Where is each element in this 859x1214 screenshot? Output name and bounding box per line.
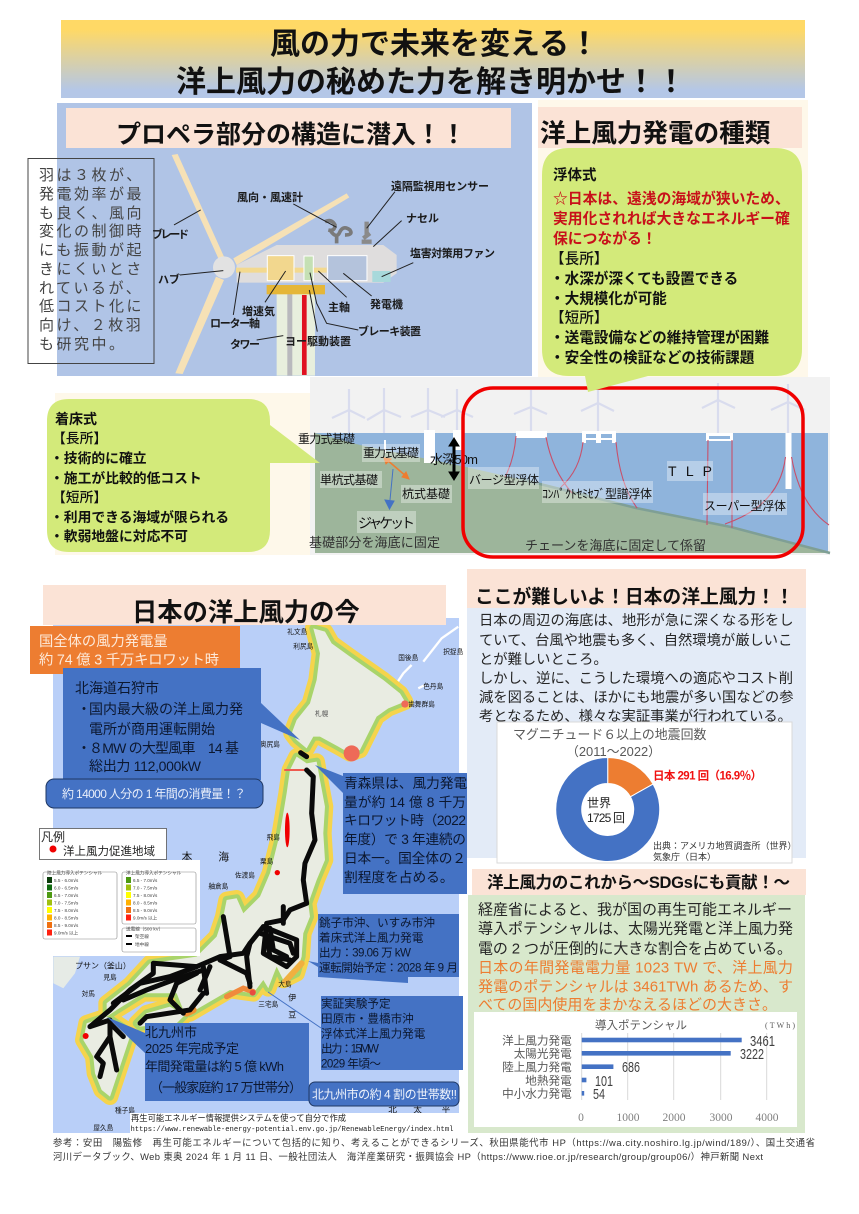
chart: introduction potential bars (474, 1012, 797, 1127)
callout: Choshi and Isumi: 出力：39.06 万 kW (319, 946, 411, 960)
callout: Tahara and Toyohashi: 浮体式洋上風力発電 (321, 1026, 426, 1040)
map place names: 屋久島 (93, 1123, 114, 1132)
turbine part labels: ブレード (152, 227, 189, 241)
turbine part labels: 主軸 (328, 300, 350, 314)
text block: future: 経産省によると、我が国の再生可能エネルギー (478, 902, 792, 918)
text block: future: べての国内使用をまかなえるほどの大きさ。 (478, 996, 777, 1014)
references: 河川データブック、Web 東奥 2024 年 1 月 11 日、一般社団法人 海洋産業研究・振興協会 HP（https://www.rioe.or.jp/research/group/group06/）神戸新聞 Next (53, 1151, 763, 1162)
callout: Ishikari Hokkaido (63, 668, 300, 780)
white legend panel: 6.0 - 6.5m/s (54, 886, 79, 890)
diagram labels: 水深50m (430, 452, 478, 467)
text block: future: 発電のポテンシャルは 3461TWh あるため、す (478, 978, 793, 996)
callout: Aomori: 青森県は、風力発電 (344, 776, 468, 791)
references: 参考：安田 陽監修 再生可能エネルギーについて包括的に知り、考えることができるシリーズ、秋田県能代市 HP（https://wa.city.noshiro.lg.jp/wind/189/）、国土交通省 (53, 1137, 815, 1148)
white legend panel: 5.5 - 6.0m/s (54, 878, 79, 883)
white legend panel: 洋上風力導入ポテンシャル (126, 870, 182, 876)
callout: Kitakyushu (107, 1017, 309, 1101)
turbine part labels: ナセル (406, 212, 439, 225)
white legend panel: 9.0m/s 以上 (133, 914, 158, 920)
heading: types of offshore wind: 洋上風力発電の種類 (540, 119, 771, 148)
diagram labels: チェーンを海底に固定して係留 (525, 538, 706, 553)
turbine part labels: タワー (230, 338, 260, 351)
callout: Ishikari Hokkaido: 総出力 112,000kW (89, 758, 202, 774)
callout: Kitakyushu: 2025 年完成予定 (145, 1041, 239, 1056)
diagram labels: 重力式基礎 (363, 446, 419, 460)
callout: Ishikari Hokkaido: ・ (77, 701, 91, 717)
map place names: 伊 (288, 993, 296, 1003)
callout: Tahara and Toyohashi: 出力：15MW (321, 1042, 379, 1056)
panel: propeller structure (28, 103, 532, 376)
coast band outer (83, 628, 405, 1097)
chart: introduction potential bars: 686 (622, 1059, 640, 1076)
white legend panel: 8.5 - 9.0m/s (133, 908, 158, 913)
panel: why it is difficult (467, 569, 806, 863)
chart: earthquakes donut: 1725 回 (587, 811, 625, 825)
map source: 再生可能エネルギー情報提供システムを使って自分で作成 (131, 1113, 346, 1123)
callout: Tahara and Toyohashi: 実証実験予定 (321, 996, 391, 1010)
heading: future (472, 869, 806, 895)
turbine part labels: 塩害対策用ファン (410, 246, 495, 260)
callout: Aomori: 量が約 14 億 8 千万 (344, 795, 466, 810)
map place names: 大島 (278, 980, 292, 989)
callout: Ishikari Hokkaido: 電所が商用運転開始 (89, 721, 215, 737)
map place names: 択捉島 (443, 647, 464, 656)
turbine part labels: ヨー駆動装置 (285, 334, 351, 348)
callout: share of households (297, 1082, 459, 1106)
map source (130, 1113, 459, 1134)
text block: difficulties: ていて、台風や地震も多く、自然環境が厳しいこ (479, 632, 792, 649)
white legend panel (43, 860, 200, 956)
references (53, 1137, 815, 1162)
text block: blade explanation: 低コスト化に (39, 298, 144, 315)
callout: fixed-bottom type: ・利用できる海域が限られる (50, 509, 229, 525)
text block: blade explanation: れているが、 (39, 280, 143, 297)
chart: introduction potential bars: 101 (595, 1073, 613, 1090)
callout: Choshi and Isumi: 着床式洋上風力発電 (319, 930, 424, 944)
Korea (53, 957, 80, 988)
map source: https://www.renewable-energy-potential.env.go.jp/RenewableEnergy/index.html (130, 1126, 454, 1134)
water depth arrow (449, 438, 459, 480)
callout: fixed-bottom type: ・技術的に確立 (50, 450, 147, 466)
text block: blade explanation: も研究中。 (39, 336, 127, 353)
map background (53, 618, 459, 1133)
callout: floating type: ・大規模化が可能 (550, 290, 667, 308)
chart: introduction potential bars: 54 (593, 1086, 605, 1103)
heading: types of offshore wind (538, 107, 802, 148)
text block: difficulties: しかし、逆に、こうした環境への適応やコスト削 (479, 670, 793, 687)
title banner: 洋上風力の秘めた力を解き明かせ！！ (176, 66, 686, 99)
chart: introduction potential bars: 太陽光発電 (514, 1047, 572, 1061)
map: Japan with wind potential (53, 627, 464, 1132)
map place names: 種子島 (115, 1105, 135, 1114)
white legend panel: 6.5 - 7.0m/s (54, 893, 79, 898)
map place names: プサン（釜山） (75, 960, 131, 970)
callout: Aomori: 割程度を占める。 (344, 870, 454, 885)
callout: Ishikari Hokkaido: 国内最大級の洋上風力発 (89, 701, 243, 717)
high wind zones (187, 770, 305, 1013)
chart: earthquakes donut: 日本 291 回（16.9％） (653, 768, 762, 782)
diagram: wind turbine cross-section (172, 154, 413, 376)
callout: fixed-bottom type: 【長所】 (52, 431, 107, 446)
callout: Tahara and Toyohashi: 2029 年頃～ (321, 1056, 381, 1070)
chart: introduction potential bars: 3000 (710, 1112, 733, 1124)
callout: national total: 約 74 億 3 千万キロワット時 (39, 652, 219, 668)
map place names: 札幌 (315, 709, 329, 718)
diagram labels: バージ型浮体 (469, 473, 539, 487)
callout: fixed-bottom type: 【短所】 (52, 490, 107, 505)
white legend panel: 7.5 - 8.0m/s (133, 893, 158, 898)
map place names: 対馬 (82, 989, 95, 998)
red highlight frame (463, 388, 803, 557)
power grid (90, 753, 315, 1077)
chart: earthquakes donut: マグニチュード６以上の地震回数 (513, 727, 706, 742)
white legend panel: 7.0 - 7.5m/s (54, 900, 79, 906)
chart: introduction potential bars: 2000 (662, 1112, 686, 1124)
map place names (75, 627, 464, 1132)
chart: introduction potential bars: 3461 (750, 1033, 775, 1050)
title banner: 風の力で未来を変える！ (270, 28, 599, 61)
diagram: foundations and floating types (298, 377, 830, 557)
callout: Ishikari Hokkaido: ８MW の大型風車 14 基 (89, 740, 239, 756)
white legend panel: 8.0 - 8.5m/s (54, 916, 79, 920)
callout: Aomori: 年度）で 3 年連続の (344, 831, 466, 847)
callout: Choshi and Isumi: 銚子市沖、いすみ市沖 (319, 916, 435, 930)
legend: promotion area: 洋上風力促進地域 (63, 844, 155, 858)
callout: floating type: ☆日本は、遠浅の海域が狭いため、 (553, 190, 790, 208)
map place names: 平 (442, 1104, 451, 1114)
callout: national total: 国全体の風力発電量 (39, 633, 168, 650)
chart: introduction potential bars: 0 (578, 1112, 584, 1124)
white legend panel: 送電線（500 kV） (126, 926, 163, 932)
diagram labels: ｺﾝﾊﾟｸﾄｾﾐｾﾌﾞ型譜浮体 (542, 486, 652, 501)
diagram labels: 重力式基礎 (298, 432, 355, 446)
map place names: 利尻島 (293, 641, 314, 650)
white legend panel: 地中線 (135, 941, 149, 948)
map place names: 本 (182, 851, 193, 864)
chart: introduction potential bars: 陸上風力発電 (502, 1060, 572, 1074)
callout: Aomori (315, 765, 468, 894)
fixed foundations (384, 430, 463, 463)
callout: national total (30, 626, 240, 674)
text block: blade explanation: 変化の制御時 (39, 223, 144, 240)
turbine part labels: ブレーキ装置 (358, 324, 421, 338)
text block: future (478, 902, 793, 1014)
label boxes (320, 444, 787, 533)
heading: difficulties: ここが難しいよ！日本の洋上風力！！ (475, 585, 794, 607)
text block: blade explanation: 発電効率が最 (39, 186, 144, 203)
chart: earthquakes donut: （2011～2022） (566, 744, 661, 759)
legend: promotion area: 凡例 (41, 830, 65, 844)
chart: introduction potential bars: 4000 (756, 1112, 779, 1124)
chart: earthquakes donut: 出典：アメリカ地質調査所（世界） (653, 840, 797, 851)
white legend panel: 6.5 - 7.0m/s (133, 878, 158, 883)
text block: blade explanation (28, 158, 154, 364)
callout: floating type: 保につながる！ (553, 230, 657, 248)
map place names: 歯舞群島 (408, 700, 435, 709)
text block: difficulties: 減を図ることは、ほかにも地震が多い国などの参 (479, 689, 794, 706)
callout: household consumption (46, 779, 263, 808)
map place names: 太 (413, 1103, 422, 1114)
chart: introduction potential bars: 地熱発電 (525, 1073, 572, 1087)
diagram labels: スーパー型浮体 (704, 499, 786, 513)
text block: future: 日本の年間発電電力量 1023 TW で、洋上風力 (478, 960, 793, 976)
chart: earthquakes donut: 気象庁（日本） (653, 851, 716, 862)
land (83, 628, 405, 1097)
text block: difficulties: とが難しいところ。 (479, 651, 608, 668)
heading: propeller structure: プロペラ部分の構造に潜入！！ (116, 121, 466, 149)
turbines (332, 383, 805, 434)
callout: fixed-bottom type: ・軟弱地盤に対応不可 (50, 528, 188, 544)
turbine part labels: 風向・風速計 (237, 190, 303, 204)
white legend panel: 7.0 - 7.5m/s (133, 886, 158, 890)
turbine part labels: 発電機 (370, 297, 403, 311)
turbine part labels (152, 179, 495, 351)
callout: Ishikari Hokkaido: ・ (77, 740, 91, 756)
turbine part labels: ハブ (158, 272, 180, 286)
callout: Aomori: キロワット時（2022 (344, 813, 466, 828)
chart: earthquakes donut: 世界 (587, 796, 611, 810)
turbine part labels: 遠隔監視用センサー (391, 179, 489, 193)
callout: Aomori: 日本一。国全体の２ (344, 851, 466, 866)
chart: earthquakes donut (497, 722, 797, 863)
callout: fixed-bottom type (47, 399, 320, 552)
map place names: 国後島 (398, 653, 419, 662)
callout: Ishikari Hokkaido: 北海道石狩市 (75, 680, 159, 696)
panel: cream backgrounds (55, 100, 808, 555)
callout: Tahara and Toyohashi: 田原市・豊橋市沖 (321, 1012, 414, 1026)
white legend panel: 架空線 (135, 933, 149, 940)
callout: floating type: 実用化されれば大きなエネルギー確 (553, 210, 790, 228)
map place names: 北 (388, 1104, 397, 1114)
callout: floating type: 浮体式 (553, 166, 597, 184)
white legend panel: 陸上風力導入ポテンシャル (47, 870, 103, 876)
callout: Kitakyushu: 年間発電量は約 5 億 kWh (145, 1059, 284, 1074)
diagram labels (298, 432, 786, 553)
map place names: 海 (218, 851, 229, 864)
callout: floating type: ・安全性の検証などの技術課題 (550, 348, 755, 366)
white legend panel: 8.0 - 8.5m/s (133, 900, 158, 906)
text block: difficulties: 日本の周辺の海底は、地形が急に深くなる形をし (479, 612, 794, 629)
map place names: 佐渡島 (235, 871, 255, 880)
text block: future: 電の 2 つが圧倒的に大きな割合を占めている。 (478, 940, 792, 958)
floating structures (516, 431, 792, 489)
map place names: 舳倉島 (208, 881, 229, 890)
chart: introduction potential bars: 1000 (616, 1112, 640, 1124)
callout: fixed-bottom type: ・施工が比較的低コスト (50, 470, 202, 486)
heading: future: 洋上風力のこれから～SDGsにも貢献！～ (487, 872, 790, 892)
diagram labels: 杭式基礎 (402, 487, 450, 501)
map place names: 色丹島 (423, 682, 444, 691)
chart: introduction potential bars: 洋上風力発電 (502, 1033, 572, 1047)
callout: Kitakyushu: （一般家庭約 17 万世帯分） (150, 1080, 302, 1095)
callout: share of households: 北九州市の約 4 割の世帯数!! (312, 1086, 457, 1102)
orange arrow (384, 458, 409, 479)
title banner (61, 20, 805, 99)
map place names: 粟島 (260, 856, 274, 865)
chart: introduction potential bars: 中小水力発電 (502, 1087, 572, 1101)
chart: introduction potential bars: 導入ポテンシャル (595, 1018, 687, 1032)
diagram labels: 単杭式基礎 (320, 473, 378, 487)
blue arrow (385, 469, 394, 509)
map place names: 豆 (288, 1010, 296, 1019)
callout: Choshi and Isumi: 運転開始予定：2028 年 9 月 (319, 960, 458, 974)
callout: household consumption: 約 14000 人分の 1 年間の消費量！？ (62, 786, 246, 801)
callout: Tahara and Toyohashi (268, 992, 463, 1070)
mooring chains (505, 436, 829, 528)
panel: Japan offshore wind today (30, 585, 468, 1134)
heading: propeller structure (66, 108, 511, 149)
callout: fixed-bottom type: 着床式 (55, 411, 97, 427)
seabed (315, 433, 830, 553)
northern islands (393, 627, 458, 688)
text block: difficulties: 考となるため、様々な実証事業が行われている。 (479, 708, 792, 725)
heading: Japan today: 日本の洋上風力の今 (132, 599, 360, 627)
text block: blade explanation: 向け、２枚羽 (39, 317, 143, 334)
map place names: 見島 (103, 972, 117, 981)
map place names: 礼文島 (287, 627, 308, 636)
callout: Kitakyushu: 北九州市 (145, 1025, 197, 1040)
heading: Japan today (43, 585, 446, 627)
white legend panel: 9.0m/s 以上 (54, 930, 79, 936)
map place names: 奥尻島 (260, 740, 280, 749)
callout: Choshi and Isumi (308, 914, 459, 983)
map place names: 飛島 (267, 832, 280, 841)
text block: difficulties (479, 612, 794, 725)
chart: introduction potential bars: 3222 (740, 1046, 764, 1063)
text block: blade explanation: 羽は３枚が、 (39, 167, 144, 184)
heading: difficulties (467, 569, 806, 608)
callout: floating type (542, 148, 802, 392)
offshore wind promotion zones (83, 813, 290, 1039)
turbine part labels: ローター軸 (210, 316, 260, 330)
callout: floating type: 【短所】 (550, 310, 608, 326)
text block: blade explanation: きにくいとさ (39, 261, 144, 278)
diagram labels: T L P (668, 463, 712, 479)
panel: future and SDGs (468, 869, 806, 1133)
diagram labels: ジャケット (358, 515, 415, 531)
callout: floating type: 【長所】 (550, 250, 608, 268)
coast band inner (83, 628, 405, 1097)
callout: floating type: ・水深が深くても設置できる (550, 270, 738, 288)
turbine part labels: 増速気 (242, 304, 275, 318)
white legend panel: 7.5 - 8.0m/s (54, 908, 79, 913)
text block: blade explanation: も良く、風向 (39, 205, 144, 222)
diagram labels: 基礎部分を海底に固定 (309, 535, 440, 550)
map place names: 三宅島 (258, 1000, 279, 1009)
legend: promotion area (40, 828, 166, 860)
chart: introduction potential bars: (TWh) (765, 1021, 795, 1030)
text block: future: 導入ポテンシャルは、太陽光発電と洋上風力発 (478, 920, 793, 938)
callout: floating type: ・送電設備などの維持管理が困難 (550, 328, 769, 346)
text block: blade explanation: にも振動が起 (39, 242, 144, 259)
white legend panel: 8.5 - 9.0m/s (54, 923, 79, 928)
